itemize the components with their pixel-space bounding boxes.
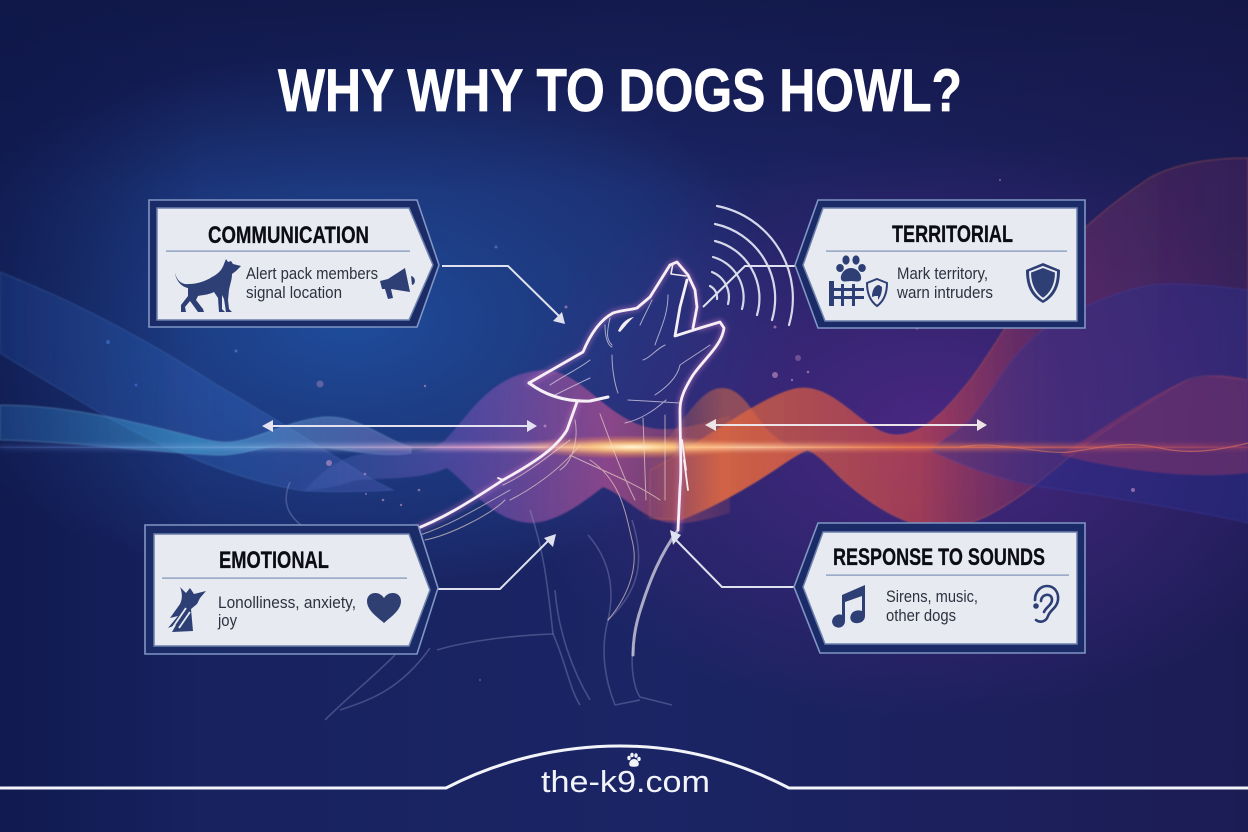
arrow: emotional to dog: [438, 534, 556, 589]
icon: howling wolf head: [168, 587, 206, 632]
icon: dog silhouette: [175, 259, 241, 312]
icon: music note: [832, 585, 865, 628]
particles: [106, 179, 1135, 681]
icon: shield: [1026, 263, 1060, 303]
wave: blue to purple to pink centre band: [304, 370, 730, 523]
arrow: territorial to sound waves: [703, 266, 795, 307]
arrow: communication to dog: [442, 266, 565, 324]
wave: orange first hump: [640, 388, 807, 520]
icon: paw, fence and shield: [829, 255, 887, 306]
double arrow: right: [705, 419, 987, 431]
wave: large blue left band: [0, 272, 393, 492]
panel: response to sounds: [794, 523, 1085, 653]
icon: footer paw: [627, 753, 641, 767]
icon: ear: [1034, 586, 1058, 622]
panel: territorial: [795, 200, 1085, 328]
double arrow: left: [262, 420, 537, 432]
text: emotional description: Lonolliness, anxiety,: [218, 593, 356, 612]
wave: cyan left band: [0, 405, 411, 455]
text: communication description: Alert pack members: [246, 264, 378, 283]
title: WHY WHY TO DOGS HOWL?: [278, 57, 962, 124]
footer arc line: [0, 746, 1248, 788]
panel: emotional: [145, 525, 438, 654]
text: territorial description: Mark territory,: [897, 264, 988, 283]
sound waves from muzzle: [710, 206, 793, 325]
dog: howling head and neck outline: [413, 262, 724, 655]
text: response description: other dogs: [886, 606, 956, 625]
text: emotional description: joy: [217, 611, 237, 630]
heading: emotional: EMOTIONAL: [219, 547, 329, 574]
wave: lower right wine band: [1060, 375, 1248, 475]
heading: communication: COMMUNICATION: [208, 222, 369, 249]
panel: communication: [149, 200, 439, 327]
wave: red main ribbon sweeping to upper right: [650, 158, 1248, 528]
glowing horizontal light beam: [0, 435, 1248, 459]
text: response description: Sirens, music,: [886, 587, 978, 606]
text: communication description: signal location: [246, 283, 342, 302]
icon: heart: [367, 593, 401, 623]
wave: pale right streak: [960, 443, 1248, 452]
wave: blue-purple ribbon on the right: [930, 284, 1248, 523]
heading: territorial: TERRITORIAL: [892, 221, 1013, 248]
heading: response to sounds: RESPONSE TO SOUNDS: [833, 544, 1045, 571]
text: territorial description: warn intruders: [896, 283, 993, 302]
arrow: response to sounds to dog: [670, 530, 795, 587]
icon: megaphone: [380, 268, 415, 299]
dog: faint lower body lines: [286, 482, 672, 720]
footer website text: the-k9.com: [541, 764, 710, 799]
